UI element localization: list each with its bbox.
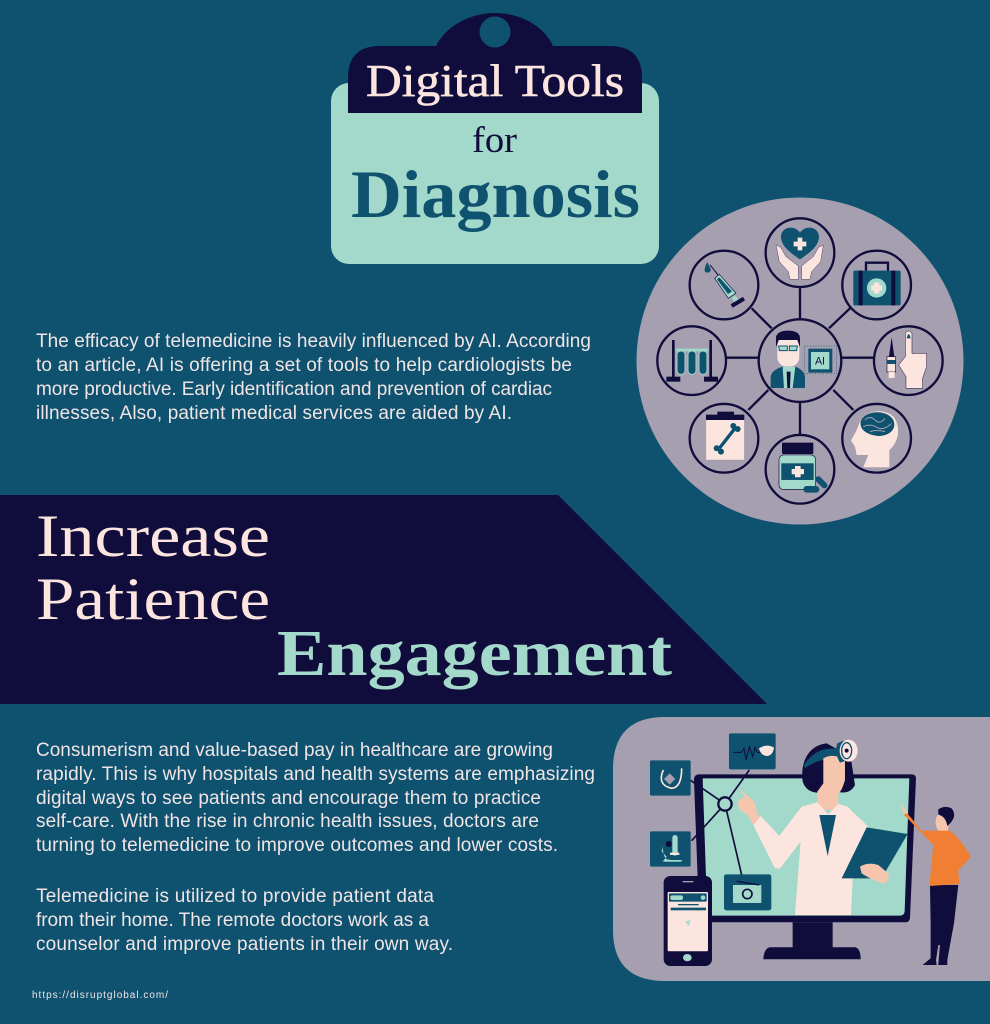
title clipboard: Diagnosis bbox=[351, 156, 640, 232]
icon: hand and syringe bbox=[874, 326, 943, 395]
tablet bbox=[842, 827, 908, 878]
text block: consumerism bbox=[36, 740, 595, 856]
panel: AI medical tools circle bbox=[636, 198, 964, 524]
hair bbox=[938, 807, 954, 826]
holding hand bbox=[860, 864, 889, 883]
banner: Increase Patience Engagement: Patience bbox=[36, 566, 270, 632]
trousers bbox=[923, 885, 958, 965]
source url: https://disruptglobal.com/ bbox=[32, 990, 168, 1001]
doctor bbox=[738, 740, 908, 915]
monitor bbox=[694, 774, 916, 959]
head band bbox=[804, 749, 840, 768]
text block: telemedicine bbox=[36, 886, 453, 955]
icon: AI doctor hub bbox=[759, 319, 841, 402]
text block: telemedicine: from their home. The remote doctors work as a bbox=[36, 910, 429, 931]
banner: Increase Patience Engagement bbox=[0, 495, 767, 704]
banner: Increase Patience Engagement: Engagement bbox=[277, 617, 672, 690]
text block: consumerism: Consumerism and value-based pay in healthcare are growing bbox=[36, 740, 553, 761]
text block: consumerism: digital ways to see patients and encourage them to practice bbox=[36, 788, 541, 809]
head mirror bbox=[836, 740, 858, 763]
text block: consumerism: rapidly. This is why hospitals and health systems are emphasizing bbox=[36, 764, 595, 785]
intro paragraph bbox=[36, 331, 591, 424]
face bbox=[936, 815, 948, 831]
smartphone bbox=[664, 876, 712, 966]
icon: first aid case bbox=[842, 251, 911, 319]
hair bbox=[802, 743, 855, 793]
AI chip: AI bbox=[815, 355, 825, 367]
text block: telemedicine: counselor and improve patients in their own way. bbox=[36, 934, 453, 955]
title clipboard: Digital Tools bbox=[366, 55, 624, 106]
connector spokes bbox=[727, 287, 873, 435]
icon: test tubes bbox=[657, 326, 726, 395]
text block: telemedicine: Telemedicine is utilized to provide patient data bbox=[36, 886, 434, 907]
title clipboard: for bbox=[472, 120, 517, 161]
text block: consumerism: turning to telemedicine to improve outcomes and lower costs. bbox=[36, 835, 558, 856]
panel: telemedicine illustration bbox=[613, 717, 990, 981]
intro paragraph: to an article, AI is offering a set of tools to help cardiologists be bbox=[36, 355, 572, 376]
small person bbox=[901, 803, 971, 965]
face and neck bbox=[817, 756, 845, 810]
icon: medicine bottle bbox=[766, 435, 834, 504]
title clipboard bbox=[331, 13, 659, 264]
raised hand bbox=[738, 789, 760, 825]
icon: brain and head bbox=[842, 404, 911, 473]
tile: heart rate bbox=[729, 733, 776, 769]
intro paragraph: illnesses, Also, patient medical services are aided by AI. bbox=[36, 403, 512, 424]
banner: Increase Patience Engagement: Increase bbox=[36, 503, 270, 569]
intro paragraph: more productive. Early identification and prevention of cardiac bbox=[36, 379, 552, 400]
arm skin bbox=[901, 803, 907, 815]
tile: camera bbox=[724, 874, 771, 910]
coat bbox=[753, 802, 868, 915]
text block: consumerism: self-care. With the rise in chronic health issues, doctors are bbox=[36, 811, 539, 832]
network lines bbox=[690, 770, 749, 875]
sweater bbox=[903, 813, 971, 886]
tile: stethoscope bbox=[650, 760, 691, 796]
intro paragraph: The efficacy of telemedicine is heavily influenced by AI. According bbox=[36, 331, 591, 352]
icon: heart in hands bbox=[766, 218, 834, 287]
icon: bone x-ray clipboard bbox=[690, 404, 758, 473]
icon: syringe bbox=[690, 251, 758, 319]
tile: microscope bbox=[650, 831, 691, 867]
